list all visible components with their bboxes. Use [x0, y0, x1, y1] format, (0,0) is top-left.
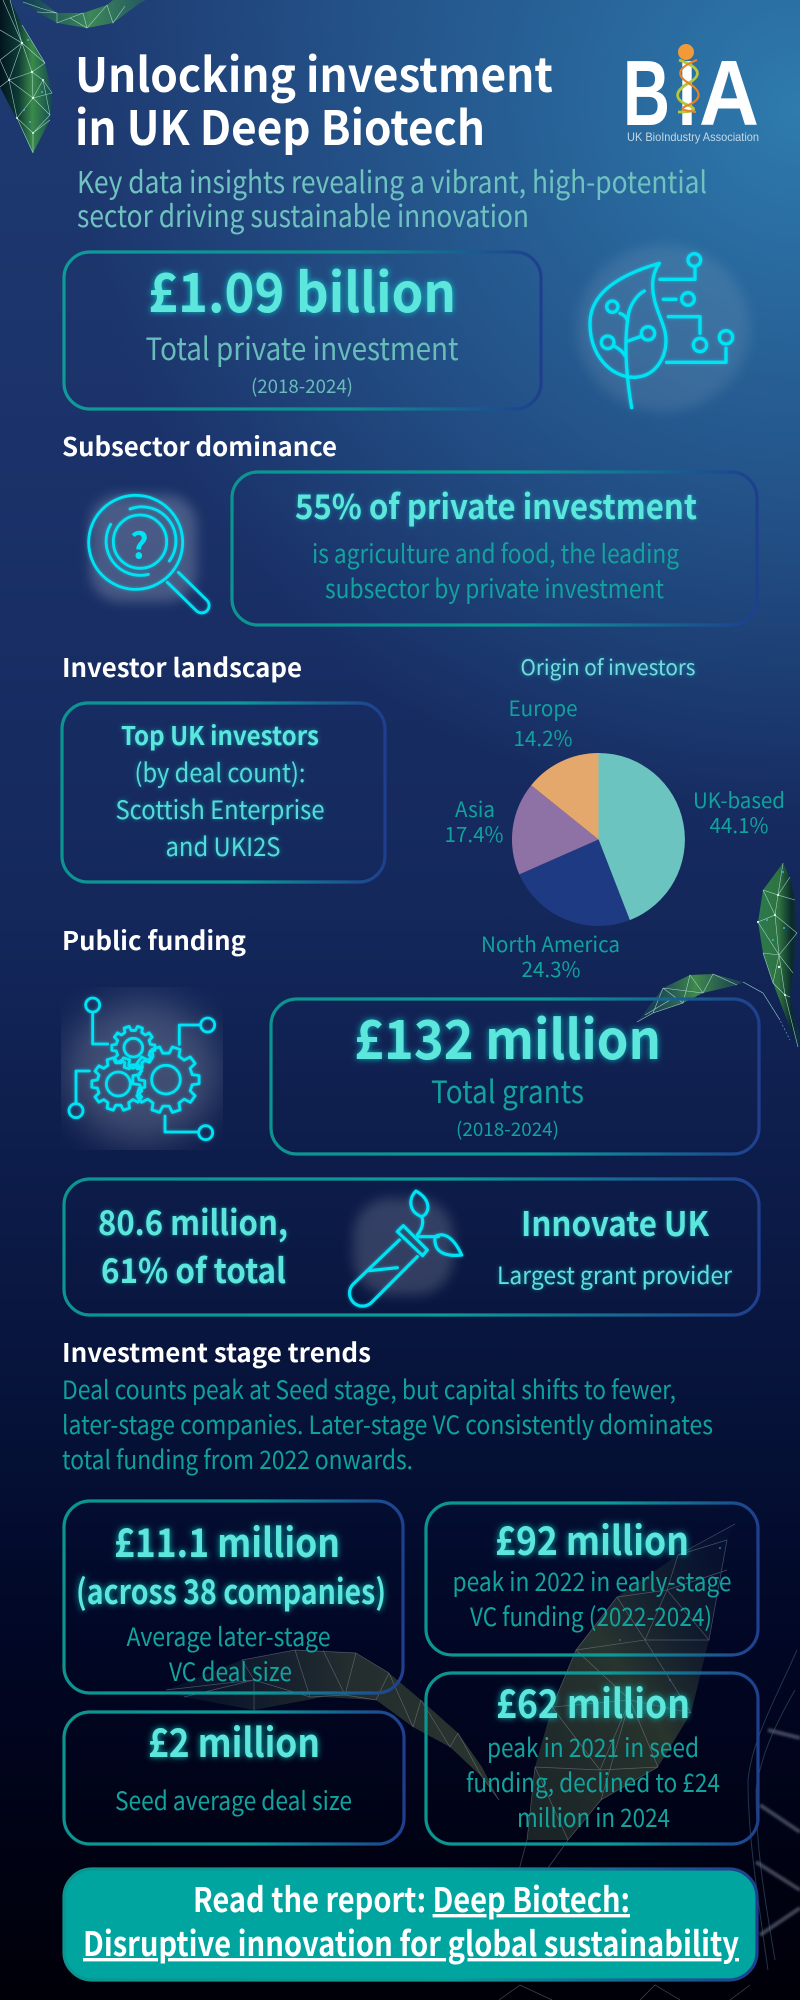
decorative leaf: right side: [757, 863, 800, 1047]
provider name: Innovate UK: [521, 1197, 710, 1246]
pie labels: 17.4%: [444, 819, 504, 849]
panel: total grants: [271, 996, 759, 1154]
panel: top UK investors: (by deal count):: [134, 753, 306, 790]
pie chart: origin of investors: [444, 693, 785, 984]
pie labels: 44.1%: [710, 810, 768, 840]
stat: 132 million: £132 million: [354, 996, 661, 1075]
decorative leaf: large dim, bottom centre: [499, 1524, 750, 2000]
panel: later-stage deal size: [64, 1501, 403, 1693]
stat: 1.09 billion: £1.09 billion: [148, 249, 456, 328]
panel: later-stage deal size: VC deal size: [169, 1652, 292, 1689]
title: [75, 37, 553, 159]
call to action: [64, 1869, 757, 1980]
panel: early-stage peak: VC funding (2022-2024): [470, 1597, 712, 1634]
subtitle: [77, 158, 707, 236]
paragraph: investment stage trends: total funding from 2022 onwards.: [62, 1440, 413, 1477]
provider label: Largest grant provider: [497, 1256, 733, 1291]
description: subsector by private investment: [325, 569, 664, 606]
decorative leaf: dim, horizontal bottom left: [166, 1650, 499, 1800]
icon: magnifying glass: ?: [130, 517, 149, 569]
panel: seed deal size: £2 million: [148, 1712, 320, 1769]
BIA logo: I: [678, 41, 696, 145]
chart title: origin of investors: Origin of investors: [520, 652, 696, 682]
panel: seed funding peak: million in 2024: [517, 1798, 670, 1835]
decorative leaf: small, above grants card: [637, 974, 790, 1040]
paragraph: investment stage trends: [62, 1370, 713, 1477]
call to action: Read the report: Deep Biotech:: [193, 1873, 630, 1922]
panel: Innovate UK: [64, 1179, 759, 1315]
panel: seed deal size: Seed average deal size: [115, 1781, 352, 1818]
heading: investor landscape: Investor landscape: [62, 648, 302, 685]
title: in UK Deep Biotech: [75, 90, 485, 159]
label: Total grants: [431, 1067, 584, 1112]
BIA logo: B: [623, 41, 670, 145]
panel: top UK investors: and UKI2S: [166, 827, 280, 864]
pie labels: North America: [481, 929, 620, 959]
panel: later-stage deal size: (across 38 companies): [76, 1565, 386, 1614]
panel: early-stage peak: [426, 1503, 758, 1655]
BIA logo: [623, 41, 759, 145]
pie labels: [444, 693, 785, 984]
paragraph: investment stage trends: later-stage companies. Later-stage VC consistently dominates: [62, 1405, 713, 1442]
panel: later-stage deal size: Average later-stage: [126, 1617, 330, 1654]
stat: 80.6 million: 80.6 million,: [98, 1196, 288, 1245]
panel: early-stage peak: peak in 2022 in early-stage: [452, 1562, 732, 1599]
stat: 80.6 million: 61% of total: [101, 1244, 286, 1293]
pie labels: 24.3%: [522, 954, 580, 984]
label: Total private investment: [146, 324, 459, 369]
description: is agriculture and food, the leading: [312, 534, 680, 571]
decorative plant: right edge bottom: [748, 1650, 800, 1970]
pie labels: UK-based: [693, 785, 785, 815]
icon: gears: [64, 998, 220, 1144]
pie labels: Europe: [508, 693, 578, 723]
decorative leaf: top left: [0, 0, 146, 153]
panel: total private investment: [64, 249, 541, 409]
pie labels: 14.2%: [514, 723, 572, 753]
date range: (2018-2024): [456, 1115, 559, 1142]
BIA logo: A: [699, 41, 759, 145]
title: Unlocking investment: [75, 37, 553, 106]
panel: later-stage deal size: £11.1 million: [114, 1512, 340, 1569]
subtitle: sector driving sustainable innovation: [77, 192, 529, 236]
heading: public funding: Public funding: [62, 921, 246, 958]
paragraph: investment stage trends: Deal counts peak at Seed stage, but capital shifts to fewer,: [62, 1370, 676, 1407]
pie labels: Asia: [455, 794, 495, 824]
stat: 80.6 million: [98, 1196, 288, 1293]
panel: top UK investors: Top UK investors: [121, 716, 319, 753]
icon: circuit leaf: [577, 245, 750, 412]
heading: subsector dominance: Subsector dominance: [62, 427, 337, 464]
panel: top UK investors: [62, 703, 385, 882]
panel: seed funding peak: [426, 1673, 758, 1844]
panel: seed deal size: [64, 1712, 404, 1844]
panel: subsector stat: [232, 472, 757, 625]
icon: magnifying glass: [89, 495, 209, 613]
panel: seed funding peak: peak in 2021 in seed: [487, 1728, 699, 1765]
date range: (2018-2024): [251, 372, 353, 399]
icon: test tube with sprout: [350, 1191, 462, 1306]
panel: seed funding peak: £62 million: [496, 1673, 690, 1730]
stat: 55 percent: 55% of private investment: [295, 480, 697, 529]
panel: seed funding peak: funding, declined to £24: [466, 1763, 720, 1800]
description: [312, 534, 680, 606]
panel: early-stage peak: £92 million: [495, 1510, 689, 1567]
BIA logo: UK BioIndustry Association: [627, 130, 759, 144]
panel: top UK investors: Scottish Enterprise: [116, 790, 324, 827]
heading: investment stage trends: Investment stage trends: [62, 1333, 371, 1370]
subtitle: Key data insights revealing a vibrant, high-potential: [77, 158, 707, 202]
